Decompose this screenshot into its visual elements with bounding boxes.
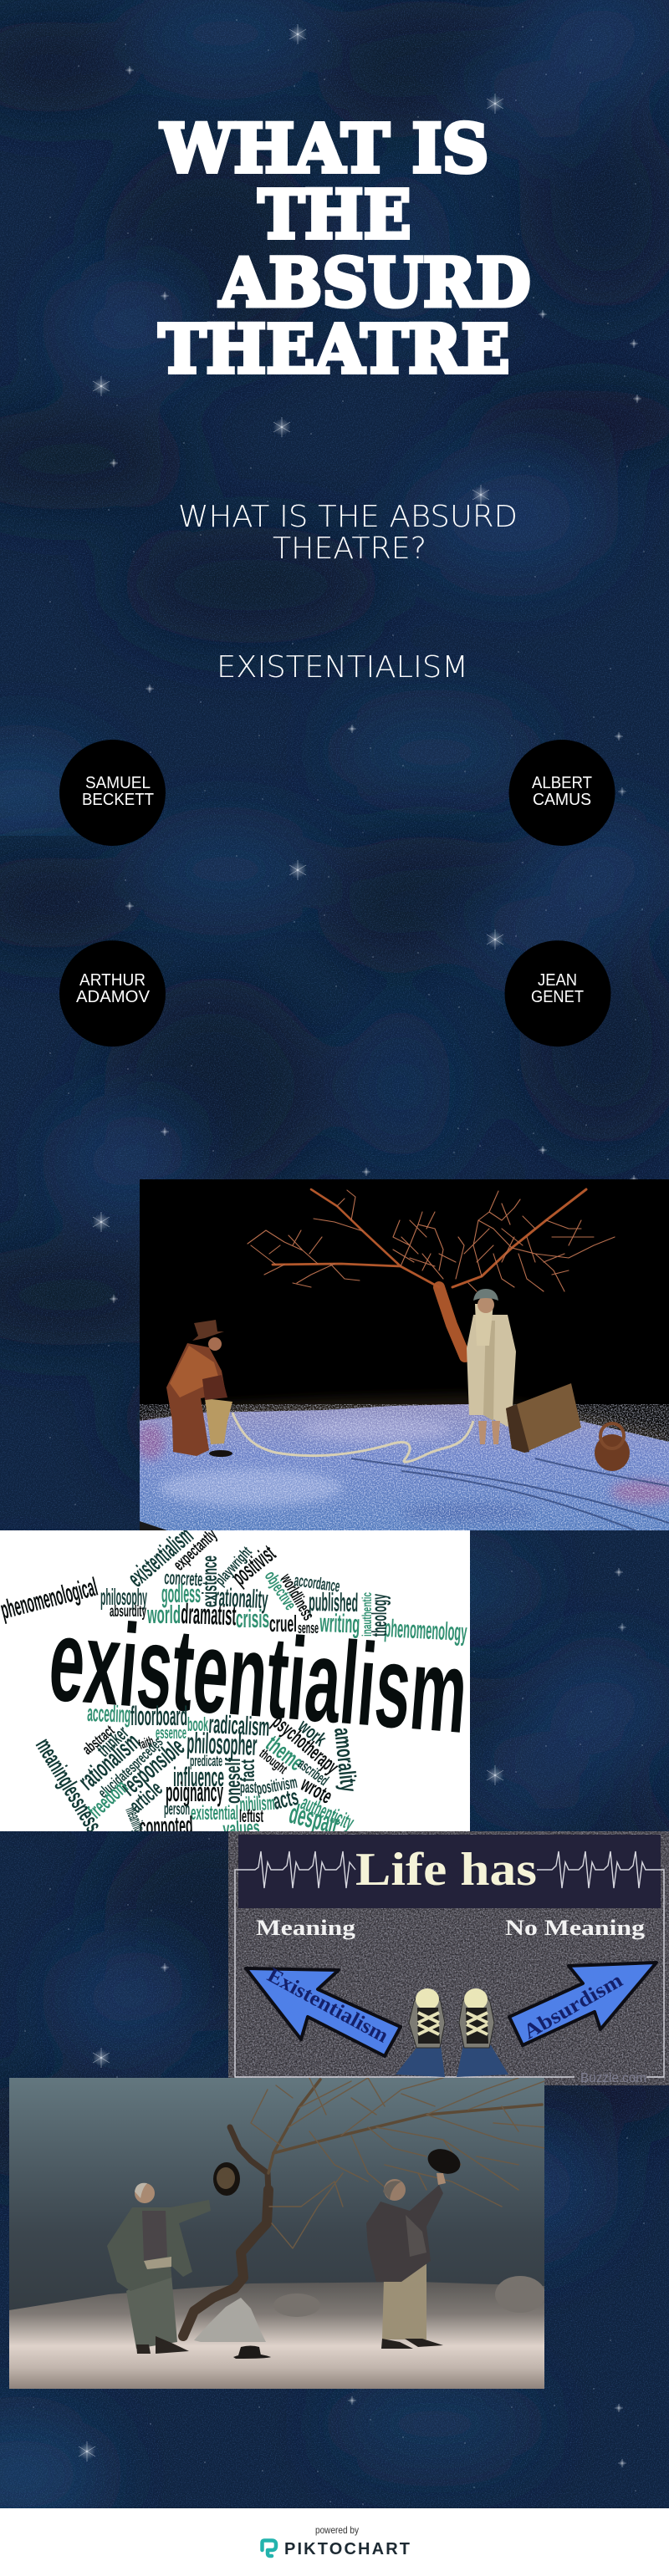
tree bbox=[183, 2078, 544, 2336]
surrounding words: rationalism bbox=[74, 1728, 146, 1795]
distant mound bbox=[273, 2276, 545, 2317]
circle: Jean Genet: JEAN bbox=[538, 971, 577, 990]
surrounding words: past bbox=[240, 1779, 257, 1797]
surrounding words: rationality bbox=[214, 1582, 269, 1614]
watermark: Buzzle.com bbox=[580, 2071, 646, 2085]
surrounding words: authenticity bbox=[298, 1791, 357, 1835]
rope bbox=[232, 1413, 473, 1462]
surrounding words: world bbox=[147, 1600, 181, 1629]
surrounding words: concrete bbox=[164, 1566, 203, 1590]
top dark band bbox=[238, 1835, 661, 1908]
circle: Arthur Adamov: ARTHUR bbox=[79, 971, 146, 990]
surrounding words: faith bbox=[137, 1734, 156, 1753]
surrounding words: predicate bbox=[190, 1753, 222, 1769]
surrounding words: expectantly bbox=[170, 1525, 221, 1575]
icon: piktochart logo bbox=[263, 2541, 276, 2556]
circle: Arthur Adamov bbox=[59, 940, 166, 1046]
title: THE bbox=[258, 176, 411, 254]
footer bbox=[0, 2508, 669, 2576]
surrounding words: philosophy bbox=[100, 1584, 147, 1610]
surrounding words: radicalism bbox=[208, 1709, 270, 1742]
arrow: existentialism: Existentialism bbox=[263, 1964, 392, 2048]
circle: Arthur Adamov: ADAMOV bbox=[76, 988, 151, 1006]
left man raising hat bbox=[107, 2162, 240, 2354]
heading: life has: Life has bbox=[355, 1844, 537, 1896]
wicker basket bbox=[595, 1423, 630, 1471]
surrounding words: meaninglessness bbox=[31, 1733, 107, 1836]
surrounding words: amorality bbox=[329, 1726, 362, 1793]
surrounding words: acceding bbox=[87, 1700, 131, 1728]
arrow: existentialism bbox=[246, 1964, 401, 2056]
surrounding words: thought bbox=[257, 1747, 289, 1777]
circle: Jean Genet: GENET bbox=[531, 988, 584, 1006]
image: existentialism word cloud bbox=[0, 1522, 472, 1841]
surrounding words: dramatist bbox=[181, 1598, 237, 1632]
surrounding words: abstract bbox=[79, 1722, 118, 1758]
surrounding words: theme bbox=[261, 1730, 309, 1775]
heading: existentialism: EXISTENTIALISM bbox=[217, 650, 468, 685]
surrounding words: despair bbox=[286, 1798, 342, 1840]
label: meaning: Meaning bbox=[256, 1916, 355, 1940]
surrounding words: thinker bbox=[93, 1722, 132, 1761]
surrounding words: freedom bbox=[84, 1775, 133, 1823]
surrounding words: crisis bbox=[236, 1604, 269, 1633]
surrounding words: work bbox=[294, 1714, 331, 1750]
subtitle: what is the absurd theatre bbox=[178, 500, 518, 566]
photo: two men raising hats beside a tree bbox=[9, 2078, 545, 2389]
right man raising hat bbox=[366, 2145, 464, 2349]
frame line and heartbeat bbox=[235, 1851, 664, 2077]
circle: Albert Camus: ALBERT bbox=[532, 774, 592, 792]
stage floor bbox=[135, 1404, 669, 1530]
surrounding words: cruel bbox=[269, 1611, 297, 1637]
subtitle: what is the absurd theatre: THEATRE? bbox=[273, 532, 426, 566]
surrounding words: writing bbox=[319, 1608, 360, 1639]
snow mound bbox=[194, 2298, 266, 2342]
surrounding words: person bbox=[164, 1800, 190, 1819]
surrounding words: phenomenological bbox=[0, 1572, 100, 1625]
standing man in pale coat bbox=[467, 1289, 516, 1444]
surrounding words: floorboard bbox=[130, 1701, 187, 1731]
hat on the floor bbox=[233, 2345, 271, 2359]
surrounding words: elucidates bbox=[95, 1759, 140, 1801]
surrounding words: godless bbox=[161, 1579, 201, 1608]
surrounding words: ascribed bbox=[295, 1755, 332, 1789]
circle: Samuel Beckett: SAMUEL bbox=[85, 774, 151, 792]
surrounding words: accordance bbox=[293, 1571, 341, 1596]
surrounding words: meaning bbox=[121, 1805, 148, 1835]
circle: Albert Camus bbox=[508, 740, 615, 846]
surrounding words: existential bbox=[191, 1802, 238, 1825]
title: ABSURD bbox=[219, 243, 530, 322]
surrounding words: absurdity bbox=[110, 1603, 146, 1621]
surrounding words: connoted bbox=[139, 1812, 193, 1841]
title: WHAT IS bbox=[161, 109, 488, 187]
surrounding words: article bbox=[125, 1777, 167, 1818]
surrounding words: precedes bbox=[128, 1733, 166, 1772]
surrounding words: oneself bbox=[222, 1758, 245, 1804]
subtitle: what is the absurd theatre: WHAT IS THE ABSURD bbox=[178, 500, 518, 534]
circle: Samuel Beckett: BECKETT bbox=[82, 791, 154, 809]
surrounding words: acts bbox=[270, 1784, 301, 1815]
title bbox=[159, 109, 530, 388]
surrounding words: sense bbox=[298, 1620, 319, 1637]
image: life has meaning or no meaning, asphalt with arrows bbox=[228, 1831, 669, 2085]
circle: Jean Genet bbox=[505, 940, 610, 1046]
surrounding words: nihilism bbox=[239, 1792, 275, 1816]
seated man in brown cloak bbox=[166, 1320, 232, 1457]
surrounding words: responsible bbox=[115, 1733, 190, 1801]
surrounding words: inauthentic bbox=[360, 1592, 375, 1637]
surrounding words: essence bbox=[156, 1724, 186, 1743]
surrounding words: positivist bbox=[227, 1540, 280, 1591]
surrounding words bbox=[0, 1522, 467, 1841]
title: THEATRE bbox=[159, 309, 510, 388]
surrounding words: leftist bbox=[239, 1807, 263, 1826]
arrow: absurdism bbox=[509, 1963, 656, 2045]
arrow: absurdism: Absurdism bbox=[520, 1969, 626, 2044]
surrounding words: playwright bbox=[212, 1543, 255, 1589]
surrounding words: existence bbox=[198, 1555, 222, 1607]
surrounding words: wrote bbox=[297, 1772, 336, 1809]
surrounding words: poignancy bbox=[166, 1777, 223, 1807]
surrounding words: worldliness bbox=[276, 1571, 318, 1623]
circle: Samuel Beckett bbox=[59, 740, 166, 846]
label: no meaning: No Meaning bbox=[505, 1916, 645, 1940]
surrounding words: objective bbox=[261, 1568, 299, 1613]
bare tree bbox=[248, 1189, 615, 1357]
surrounding words: psychotherapy bbox=[268, 1710, 343, 1779]
photo: stage scene with tree, rope and suitcase bbox=[135, 1179, 669, 1530]
piktochart wordmark: PIKTOCHART bbox=[284, 2540, 410, 2558]
snowy stage floor bbox=[9, 2282, 544, 2389]
surrounding words: existentialism bbox=[123, 1522, 198, 1592]
suitcase bbox=[506, 1383, 581, 1453]
surrounding words: book bbox=[187, 1713, 208, 1735]
powered by: powered by bbox=[315, 2524, 359, 2536]
surrounding words: theology bbox=[368, 1594, 391, 1637]
surrounding words: philosopher bbox=[186, 1727, 258, 1762]
text: phenomenology bbox=[384, 1615, 467, 1647]
surrounding words: values bbox=[222, 1816, 260, 1841]
surrounding words: published bbox=[309, 1587, 358, 1617]
feet in sneakers and jeans bbox=[396, 1988, 508, 2077]
surrounding words: influence bbox=[173, 1762, 224, 1792]
circle: Albert Camus: CAMUS bbox=[533, 791, 591, 809]
surrounding words: fact bbox=[237, 1759, 258, 1782]
surrounding words: positivism bbox=[255, 1774, 299, 1799]
